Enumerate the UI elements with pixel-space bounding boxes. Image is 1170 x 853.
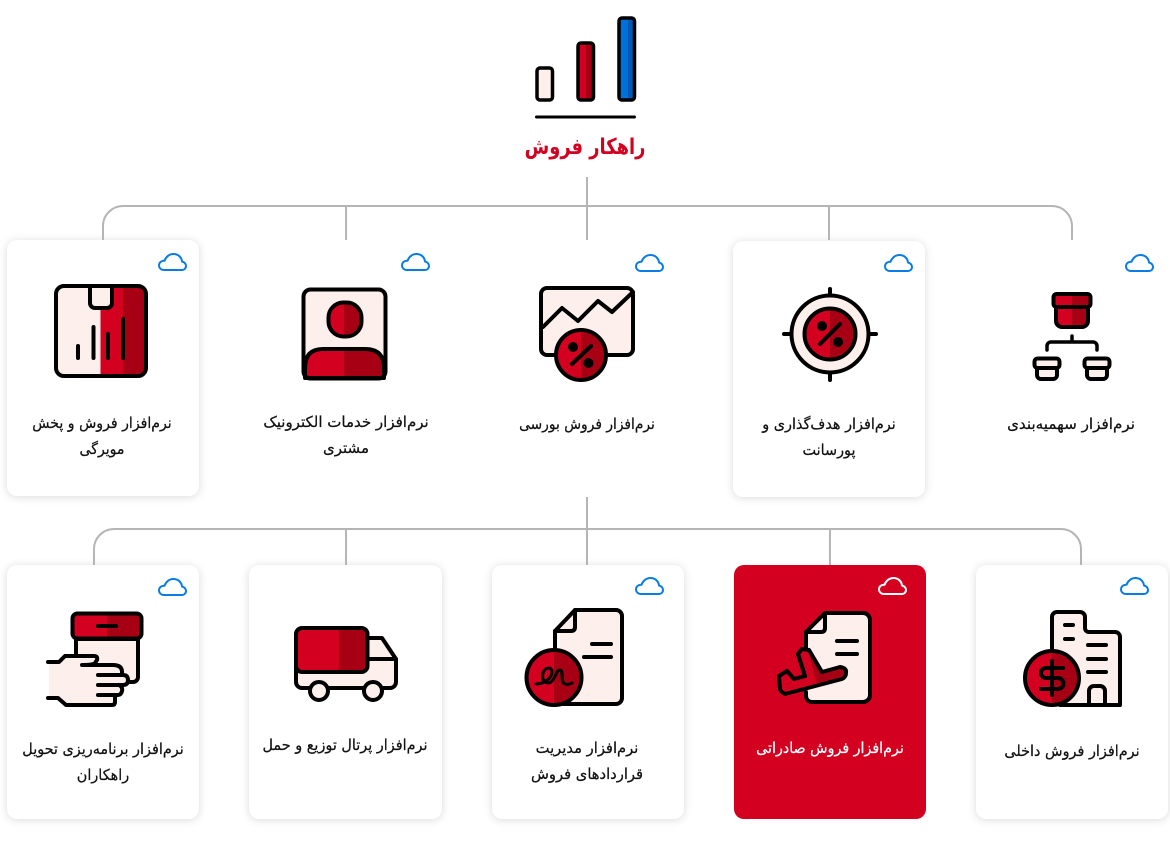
icon: cloud top 3 <box>636 255 663 271</box>
panel: card top 5 <box>976 241 1168 497</box>
connector: top tree <box>103 177 1072 240</box>
label bottom 3: نرم‌افزار مدیریت <box>536 739 638 757</box>
panel: card bottom 1 <box>7 565 199 819</box>
icon: hierarchy <box>1034 294 1110 379</box>
icon: chart with percent <box>541 288 633 380</box>
icon: cloud top 1 <box>159 254 186 270</box>
icon: target percent <box>784 289 876 380</box>
connector: bottom tree <box>94 497 1081 565</box>
icon: delivery truck <box>296 628 396 700</box>
label bottom 2: نرم‌افزار پرتال توزیع و حمل <box>263 736 427 754</box>
panel: card top 4 <box>733 241 925 497</box>
label bottom 1: راهکاران <box>77 766 129 784</box>
panel: card bottom 5 <box>976 565 1168 819</box>
title: راهکار فروش <box>525 135 645 160</box>
icon: cloud bottom 5 <box>1121 578 1148 594</box>
label top 4 <box>762 415 896 459</box>
icon: cloud top 5 <box>1126 255 1153 271</box>
label top 2 <box>263 413 429 457</box>
icon: cloud top 2 <box>402 254 429 270</box>
icon: building with dollar <box>1025 612 1120 705</box>
panel: card top 1 <box>7 240 199 496</box>
icon: contract with signature <box>526 610 622 705</box>
label top 2: نرم‌افزار خدمات الکترونیک <box>263 413 429 431</box>
label top 2: مشتری <box>323 439 369 457</box>
icon: box with bars <box>56 286 146 376</box>
label top 4: پورسانت <box>802 441 856 459</box>
icon: hand holding box <box>48 614 142 705</box>
label top 1: مویرگی <box>79 440 125 458</box>
label bottom 3 <box>531 739 643 783</box>
label top 4: نرم‌افزار هدف‌گذاری و <box>762 415 896 433</box>
icon: cloud top 4 <box>885 255 912 271</box>
icon: cloud bottom 3 <box>636 578 663 594</box>
label bottom 1 <box>22 740 184 784</box>
label bottom 1: نرم‌افزار برنامه‌ریزی تحویل <box>22 740 184 758</box>
icon: customer profile <box>304 290 386 378</box>
label bottom 3: قراردادهای فروش <box>531 765 643 783</box>
label top 3: نرم‌افزار فروش بورسی <box>519 415 655 433</box>
icon: bar chart header <box>536 18 635 117</box>
label bottom 5: نرم‌افزار فروش داخلی <box>1004 742 1140 760</box>
label top 1: نرم‌افزار فروش و پخش <box>32 414 172 432</box>
panel: card bottom 3 <box>492 565 684 819</box>
panel: card bottom 4 highlighted <box>734 565 926 819</box>
icon: cloud bottom 1 <box>159 579 186 595</box>
panel: card top 3 <box>491 240 683 496</box>
panel: card top 2 <box>250 240 442 496</box>
label top 5: نرم‌افزار سهمیه‌بندی <box>1007 415 1135 433</box>
label top 1 <box>32 414 172 458</box>
icon: cloud bottom 4 white <box>879 578 906 594</box>
label bottom 4: نرم‌افزار فروش صادراتی <box>756 739 904 757</box>
icon: export document with plane <box>779 612 870 702</box>
panel: card bottom 2 <box>249 565 442 819</box>
